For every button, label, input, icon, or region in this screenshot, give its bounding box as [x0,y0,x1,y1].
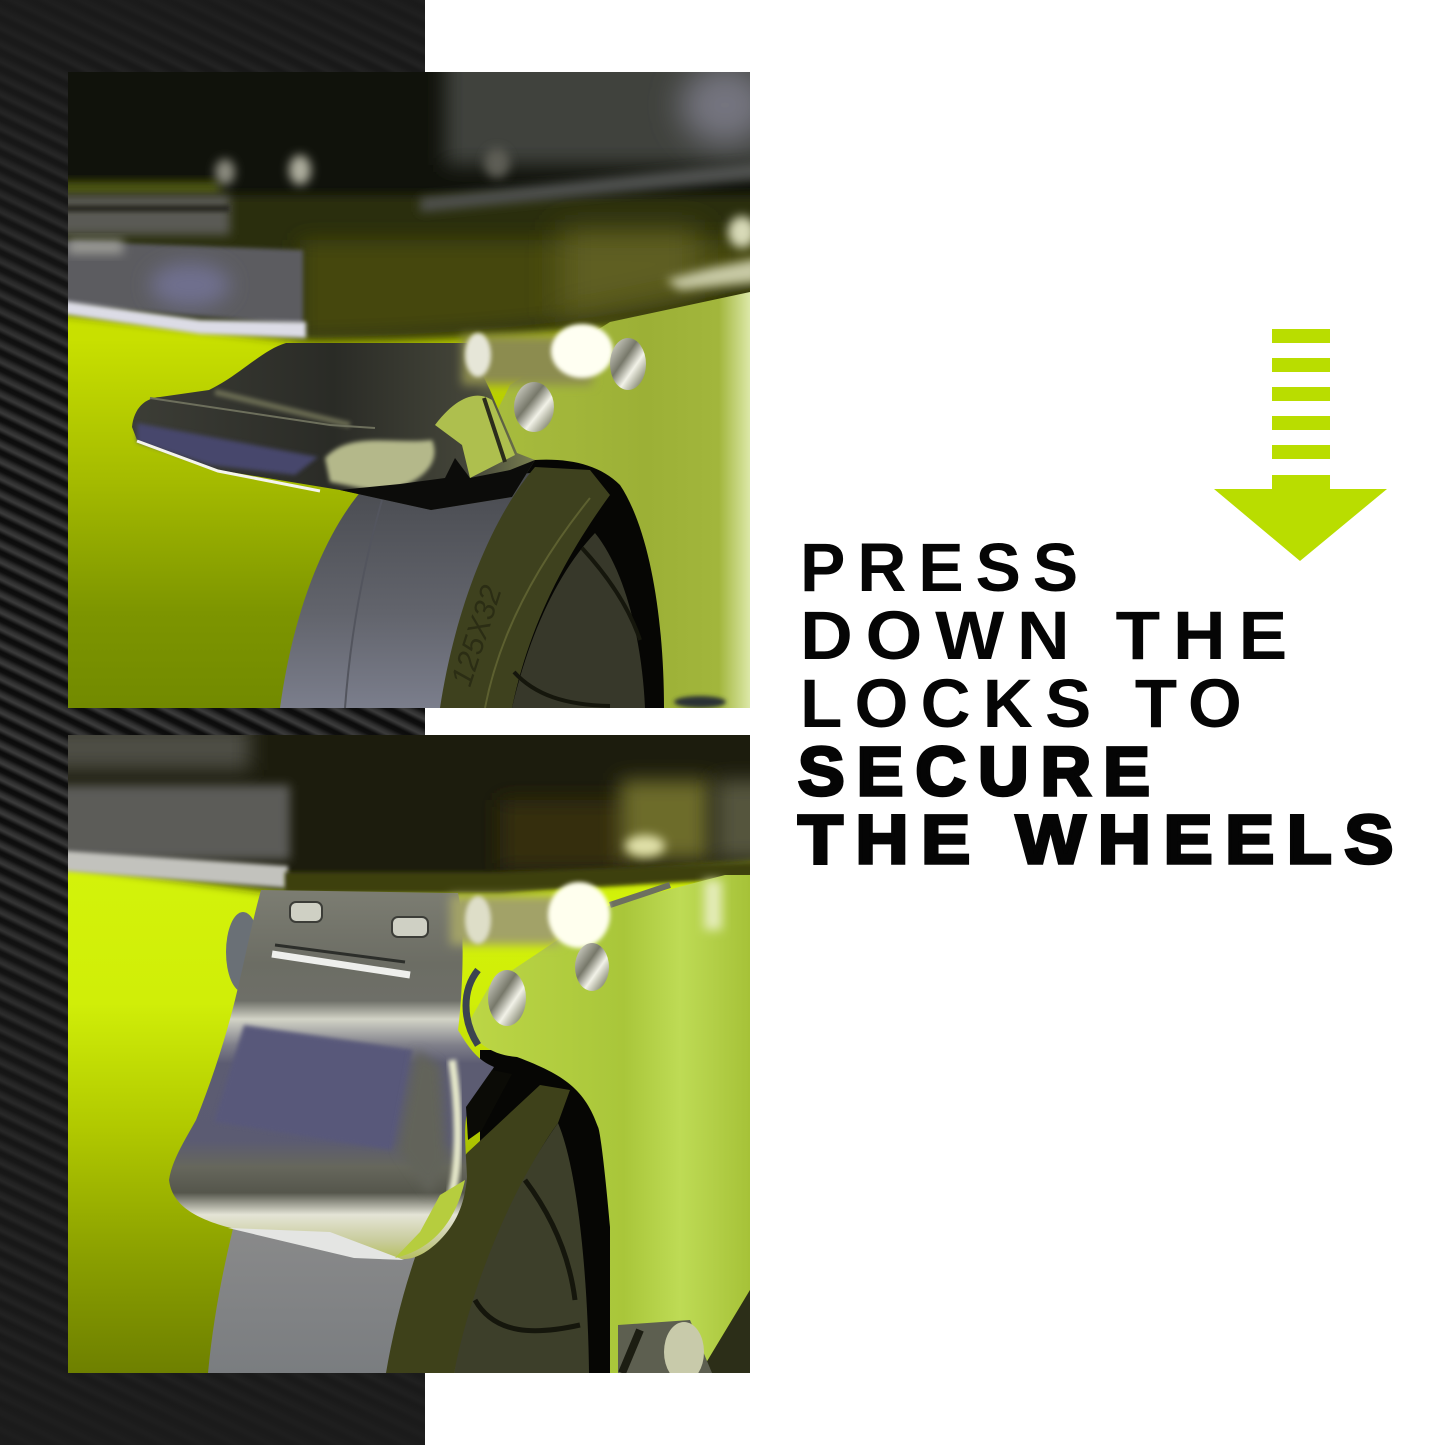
icon: striped down arrow [1214,329,1387,561]
heading: press down the locks to secure the wheels: PRESS [800,529,1090,606]
light glare [462,324,613,385]
caster top plate [68,72,750,346]
rivets [466,943,609,1045]
light glare [450,882,610,948]
wheel [280,460,664,708]
fork bracket [490,292,750,708]
panel: lock released photo [68,72,750,708]
fork bracket [470,875,750,1382]
brake lever [169,890,512,1260]
rivets [514,338,646,432]
heading: press down the locks to secure the wheels: DOWN THE [800,597,1300,674]
band gap: white below top photo [425,708,750,735]
heading: press down the locks to secure the wheels [798,529,1406,878]
wheel [208,1050,610,1373]
brake lever [132,343,535,510]
caster top plate [68,735,750,898]
heading: press down the locks to secure the wheels: THE WHEELS [798,801,1406,878]
tyre size marking: 125X32 [445,581,509,690]
panel: lock engaged photo [68,735,750,1373]
heading: press down the locks to secure the wheels: LOCKS TO [800,665,1254,742]
heading: press down the locks to secure the wheels: SECURE [798,733,1162,810]
background: carbon-fibre striped band [0,0,425,1445]
